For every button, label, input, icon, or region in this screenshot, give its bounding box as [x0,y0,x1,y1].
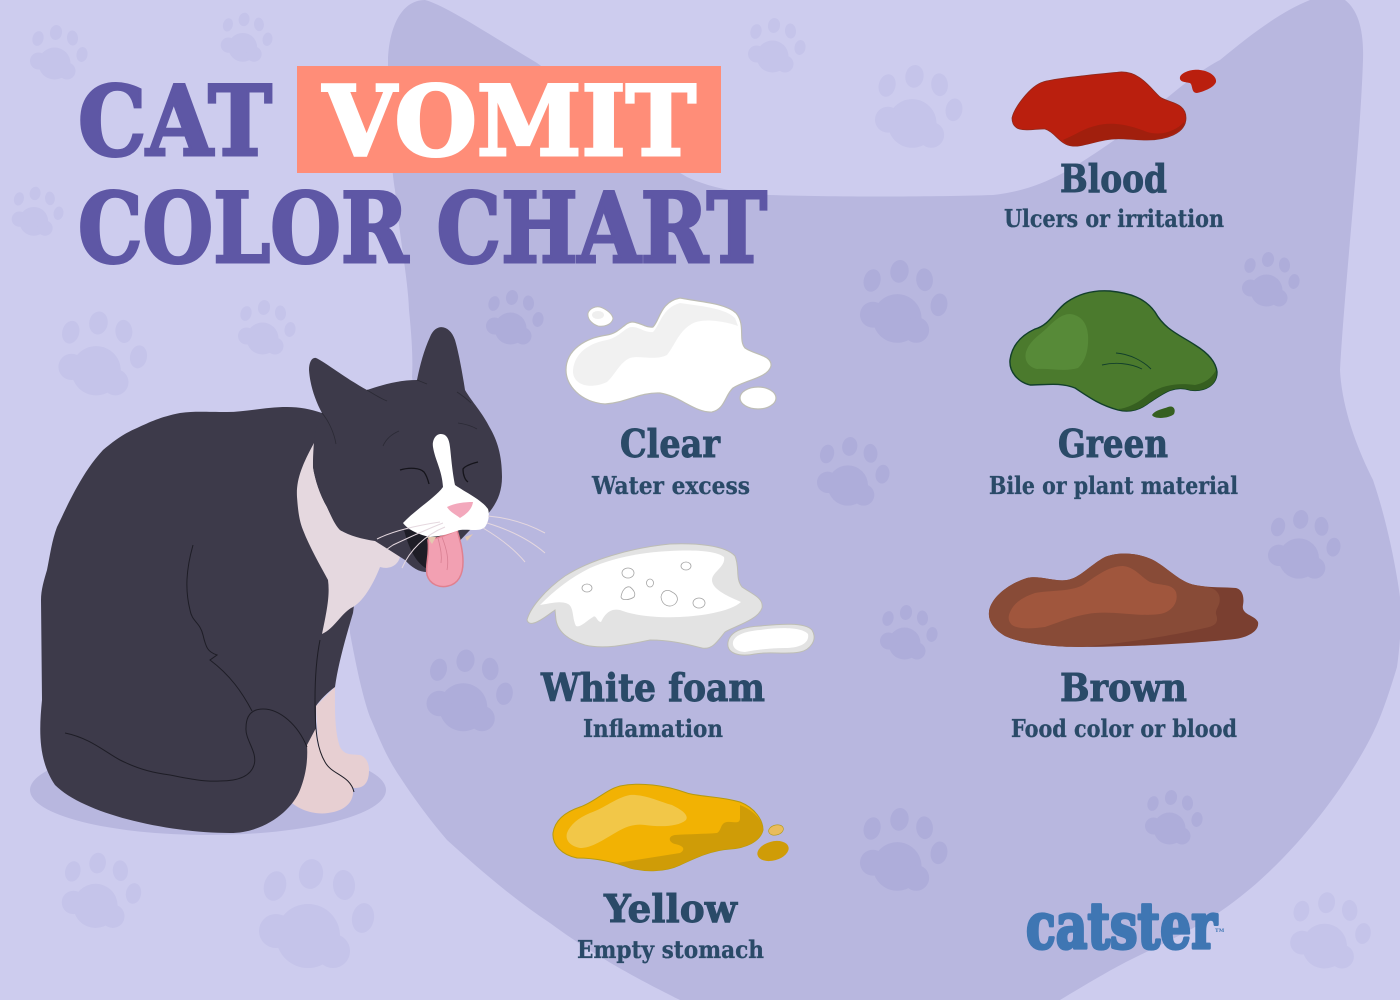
label: clear: Water excess [591,471,750,500]
title: VOMIT [322,65,696,178]
label: brown [1011,665,1237,743]
illustration: yellow puddle [553,784,791,871]
label: green: Bile or plant material [989,471,1238,500]
background cat silhouette [349,0,1400,1000]
illustration: vomiting cat [30,327,545,835]
label: blood [1004,156,1224,233]
label: green [989,421,1238,500]
catster logo: catster [1026,889,1218,964]
title: COLOR CHART [78,172,767,285]
label: yellow: Yellow [603,886,738,931]
label: clear: Clear [620,421,721,466]
label: white foam: White foam [540,665,765,710]
illustration: blood puddle [1012,70,1216,146]
label: blood: Blood [1060,156,1167,201]
label: yellow [577,886,764,964]
illustration: green puddle [1010,291,1217,418]
illustration: brown puddle [989,554,1258,647]
illustration: clear puddle [566,298,776,412]
label: brown: Brown [1060,665,1187,710]
illustration: white foam puddle [527,544,814,655]
catster logo: TM [1215,928,1225,934]
label: blood: Ulcers or irritation [1004,204,1224,233]
label: yellow: Empty stomach [577,935,764,964]
label: clear [591,421,750,500]
label: white foam [540,665,765,743]
title [78,65,767,285]
label: brown: Food color or blood [1011,714,1237,743]
label: white foam: Inflamation [583,714,723,743]
title: CAT [78,65,272,178]
label: green: Green [1058,421,1168,466]
